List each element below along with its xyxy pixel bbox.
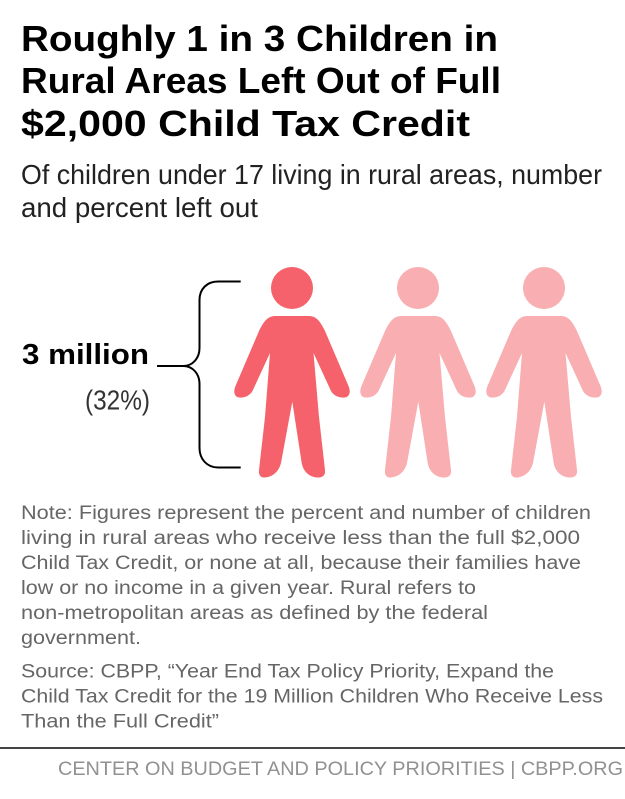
icon: second child: [360, 267, 476, 478]
figure label: 3 million (32%): (32%): [85, 384, 150, 416]
note text: living in rural areas who receive less than the full $2,000: [21, 528, 580, 549]
bracket: [157, 282, 241, 468]
figure label: 3 million (32%): 3 million: [22, 339, 149, 371]
title: [21, 18, 501, 144]
title: $2,000 Child Tax Credit: [21, 103, 470, 144]
subtitle: [21, 159, 602, 223]
footer credit: CENTER ON BUDGET AND POLICY PRIORITIES | CBPP.ORG: [58, 759, 623, 780]
icon: third child: [486, 267, 602, 478]
subtitle: Of children under 17 living in rural areas, number: [21, 159, 602, 190]
source text: [21, 662, 603, 732]
note text: Note: Figures represent the percent and number of children: [21, 503, 591, 524]
note text: non-metropolitan areas as defined by the federal: [21, 603, 488, 624]
title: Rural Areas Left Out of Full: [21, 60, 501, 101]
note text: low or no income in a given year. Rural refers to: [21, 578, 476, 599]
figure label: 3 million (32%): [22, 339, 150, 416]
note text: government.: [21, 628, 141, 649]
note text: Child Tax Credit, or none at all, because their families have: [21, 553, 581, 574]
subtitle: and percent left out: [21, 192, 258, 223]
title: Roughly 1 in 3 Children in: [21, 18, 498, 59]
source text: Source: CBPP, “Year End Tax Policy Priority, Expand the: [21, 662, 554, 682]
icon: highlighted child: [234, 267, 350, 478]
source text: Child Tax Credit for the 19 Million Children Who Receive Less: [21, 686, 603, 708]
note text: [21, 503, 591, 649]
source text: Than the Full Credit”: [21, 712, 219, 732]
